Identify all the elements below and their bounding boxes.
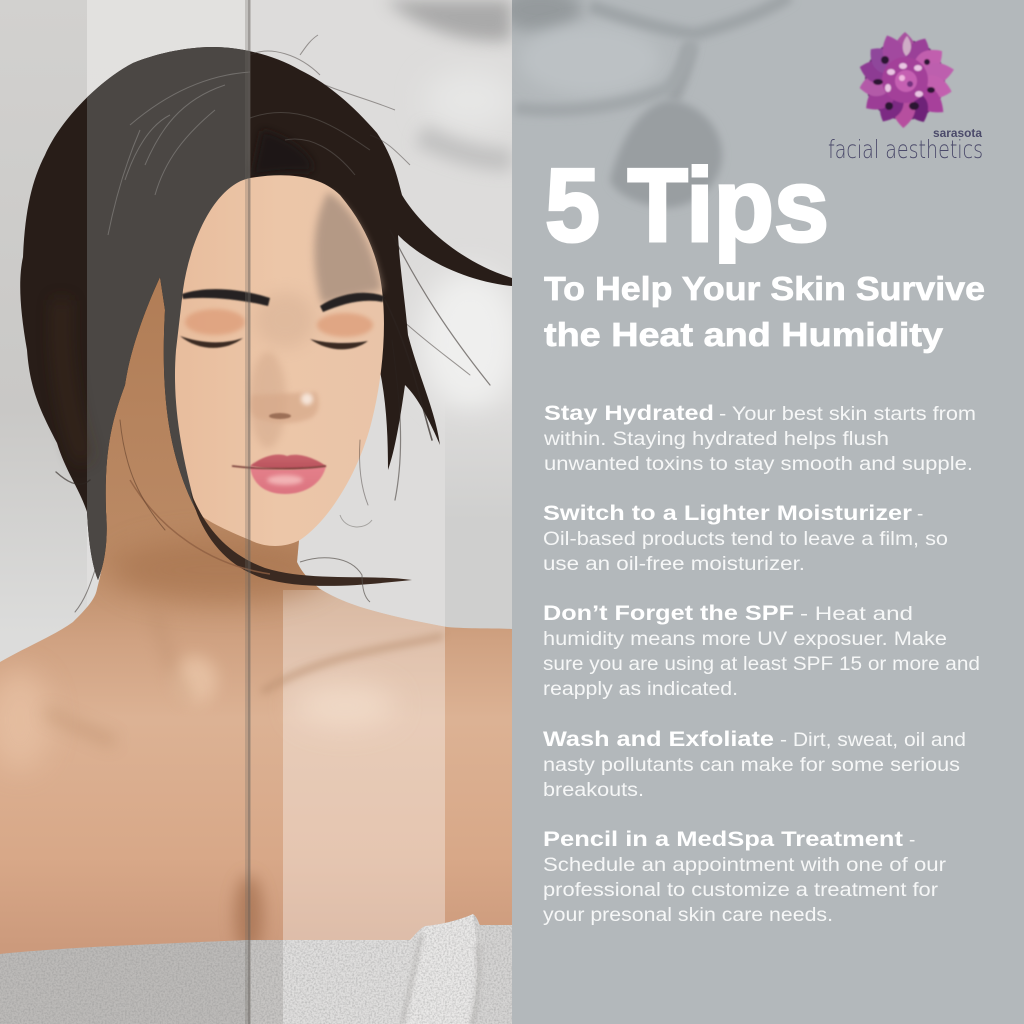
background stripes [0,0,512,662]
tip 3: SPF: reapply as indicated. [543,679,738,700]
tip 5: medspa treatment: Pencil in a MedSpa Treatment [543,828,903,851]
tip 5: medspa treatment: professional to customize a treatment for [543,880,939,901]
panel: grey background with leaf shadows [512,0,792,210]
logo: Sarasota Facial Aesthetics [828,31,983,164]
loose hair wisps [56,230,490,612]
tip 3: SPF: sure you are using at least SPF 15 or more and [543,654,980,675]
tip 3: SPF [543,602,980,700]
eyebrow left [182,289,270,306]
tip 2: lighter moisturizer: use an oil-free moisturizer. [543,554,805,575]
tip 1: stay hydrated [543,402,976,475]
tip 2: lighter moisturizer [543,502,948,575]
nose [251,392,319,423]
subtitle: To Help Your Skin Survive [544,270,985,307]
towel [0,914,512,1024]
lips [232,454,326,494]
icon: purple dahlia flower [857,31,956,128]
tip 5: medspa treatment: - [909,830,915,851]
subtitle: the Heat and Humidity [544,316,944,353]
subtitle [544,270,985,353]
leaf shadow [610,100,722,208]
tip 4: wash and exfoliate: Wash and Exfoliate [543,728,774,751]
face [175,175,384,546]
tip 1: stay hydrated: Stay Hydrated [544,402,714,425]
photo: woman with closed eyes [0,0,520,1024]
tip 4: wash and exfoliate [543,728,966,801]
tip 2: lighter moisturizer: Oil-based products tend to leave a film, so [543,529,948,550]
tip 1: stay hydrated: - Your best skin starts from [719,404,976,425]
tip 3: SPF: humidity means more UV exposuer. Make [543,629,947,650]
eyelash left [180,336,243,348]
tip 2: lighter moisturizer: Switch to a Lighter Moisturizer [543,502,912,525]
eyelids [185,309,373,337]
forehead shadow [314,192,382,304]
tip 5: medspa treatment: Schedule an appointment with one of our [543,855,947,876]
logo text: sarasota: sarasota [933,126,982,140]
sweeping lower strand [130,480,412,602]
tip 4: wash and exfoliate: breakouts. [543,780,644,801]
shoulders and chest [0,278,512,954]
tip 2: lighter moisturizer: - [917,504,923,525]
centre seam [245,0,251,1024]
frizz strands at top and right [250,35,410,165]
eyelash right [310,339,368,349]
tip 1: stay hydrated: unwanted toxins to stay smooth and supple. [544,454,973,475]
eyebrow right [320,293,384,312]
tip 4: wash and exfoliate: - Dirt, sweat, oil and [780,730,966,751]
tip 5: medspa treatment [543,828,947,926]
hair highlights [108,72,370,235]
tip 5: medspa treatment: your presonal skin care needs. [543,905,833,926]
tip 3: SPF: Don’t Forget the SPF [543,602,794,625]
tip 4: wash and exfoliate: nasty pollutants can make for some serious [543,755,960,776]
hair mass [20,47,512,580]
title: 5 Tips: 5 Tips [545,148,829,264]
tip 1: stay hydrated: within. Staying hydrated helps flush [543,429,889,450]
tip 3: SPF: - Heat and [800,604,913,625]
